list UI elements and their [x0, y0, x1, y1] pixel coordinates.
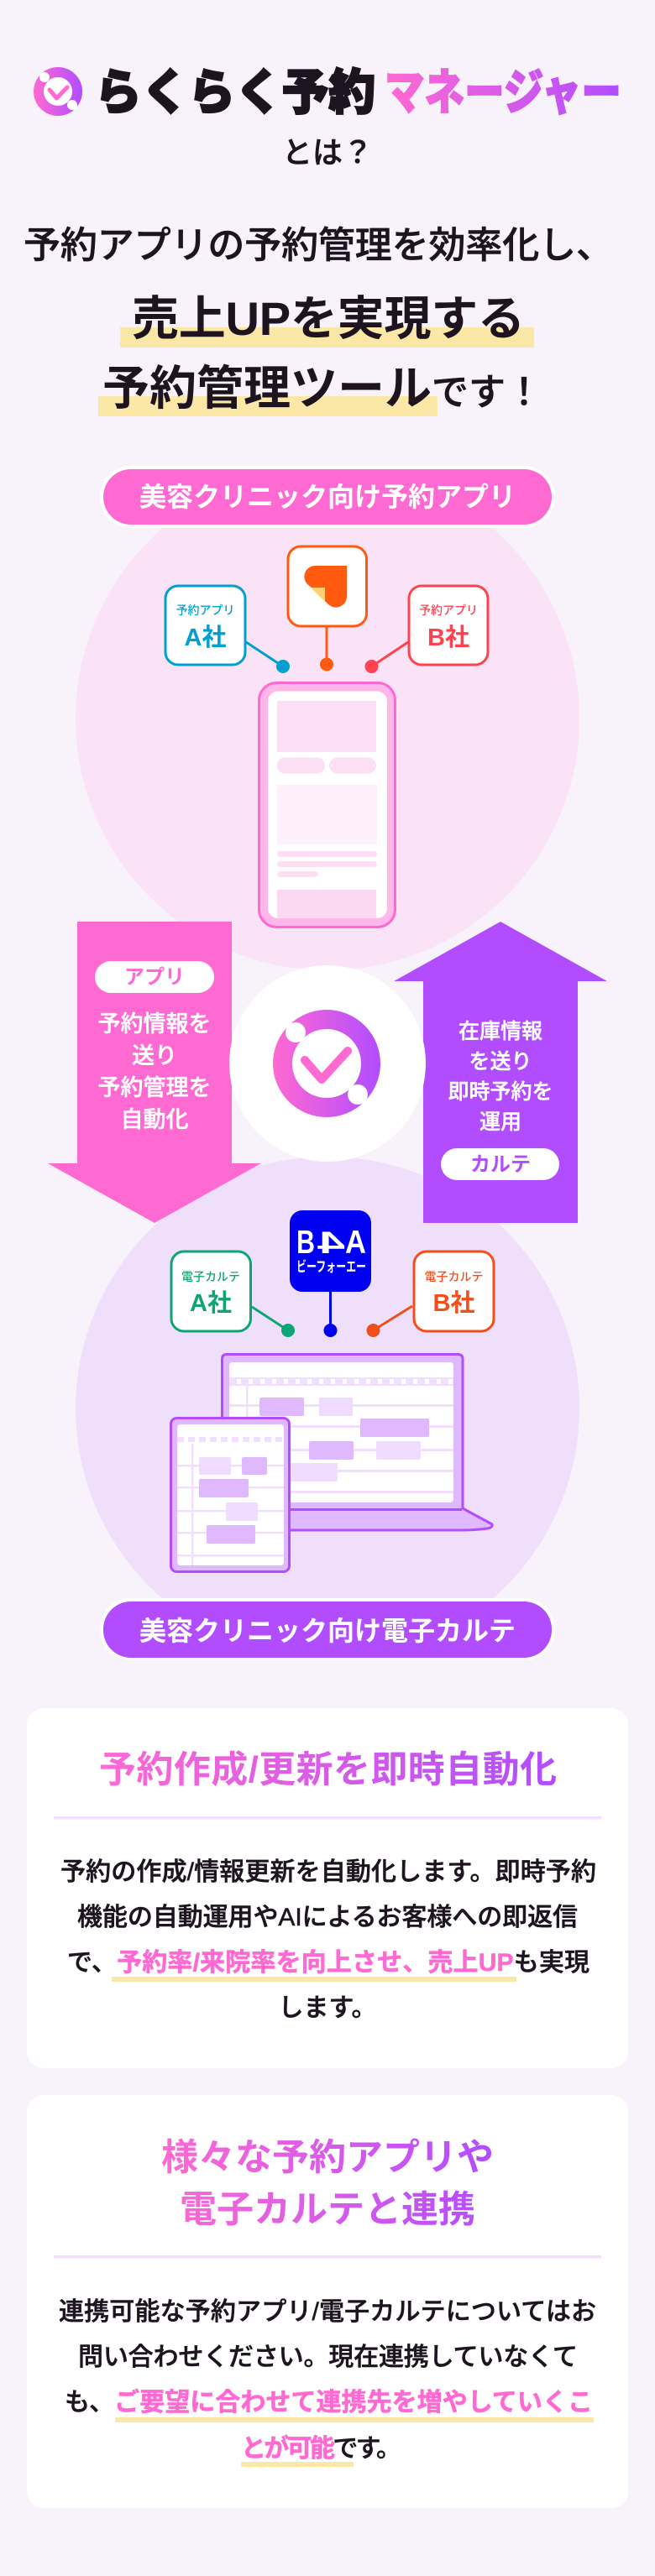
card 2 underlines [115, 2417, 594, 2467]
arrow text: 自動化 [121, 1107, 188, 1132]
highlight band line 2 [120, 327, 534, 347]
heading: とは？: とは？ [282, 135, 373, 170]
card 1 body: 予約の作成/情報更新を自動化します。即時予約 [60, 1858, 596, 1886]
headline line 2: 売上UPを実現する [132, 292, 525, 345]
card 1 heading: 予約作成/更新を即時自動化 [99, 1749, 557, 1790]
card 2 heading [161, 2137, 494, 2230]
tablet illustration [171, 1419, 289, 1571]
label pill: アプリ: アプリ [124, 966, 185, 989]
headline line 3: 予約管理ツールです！ [102, 362, 542, 415]
card: app A: 予約アプリ [176, 604, 235, 617]
logo [39, 65, 621, 120]
arrow text: 予約情報を [97, 1011, 212, 1037]
pill: reservation apps label: 美容クリニック向け予約アプリ [139, 482, 516, 512]
arrow text: 送り [132, 1043, 177, 1069]
card 2 body [59, 2298, 596, 2463]
icon: B4A logo [290, 1210, 371, 1292]
card 2 body: 連携可能な予約アプリ/電子カルテについてはお [59, 2298, 596, 2326]
card 1 body [60, 1858, 596, 2022]
arrow: records to apps [394, 922, 607, 1223]
logo wordmark [95, 65, 621, 120]
card: record B [414, 1251, 494, 1331]
pill: reservation apps label [100, 466, 555, 528]
card: app B [409, 586, 488, 665]
icon: center reservation app [288, 546, 366, 626]
panel: card 2 [27, 2095, 628, 2508]
card: app A [165, 586, 245, 665]
connector: app A [246, 642, 290, 673]
label pill: アプリ [95, 961, 214, 993]
card 1 body: 機能の自動運用やAIによるお客様への即返信 [77, 1904, 578, 1931]
phone illustration [259, 683, 395, 927]
arrow: apps to records [48, 922, 261, 1223]
panel: card 1 [27, 1708, 628, 2068]
icon: B4A logo: 4 [317, 1225, 345, 1260]
pill: medical records label [100, 1598, 555, 1660]
card: record B: 電子カルテ [425, 1270, 484, 1283]
card: record B: B社 [433, 1289, 474, 1317]
connector: center record [324, 1292, 338, 1337]
card: record A [171, 1251, 250, 1331]
connector: center app [320, 627, 333, 671]
logo wordmark: らくらく予約 [95, 65, 375, 120]
card: app B: 予約アプリ [419, 604, 478, 617]
card 1 underline [112, 1977, 516, 1982]
arrow text [448, 1020, 553, 1134]
headline line 1: 予約アプリの予約管理を効率化し、 [24, 225, 613, 266]
highlight band line 3 [98, 396, 438, 416]
card 2 body: 問い合わせください。現在連携していなくて [78, 2343, 578, 2371]
icon: B4A logo: ビーフォーエー [296, 1258, 366, 1275]
label pill: カルテ [441, 1148, 559, 1180]
connector: app B [364, 642, 408, 673]
connector: record A [252, 1307, 295, 1337]
icon: B4A logo: B [296, 1225, 315, 1261]
panel: reservation apps circle [76, 467, 579, 970]
label pill: カルテ: カルテ [470, 1153, 531, 1176]
icon: logo mark [39, 72, 77, 111]
arrow text: 運用 [479, 1110, 521, 1134]
card 2 heading: 電子カルテと連携 [180, 2189, 475, 2230]
arrow text: 即時予約を [448, 1080, 553, 1104]
card: record A: 電子カルテ [181, 1270, 240, 1283]
card 1 body: します。 [279, 1994, 376, 2022]
icon: B4A logo: A [345, 1225, 366, 1261]
icon: center hub logo [229, 965, 426, 1162]
panel: medical record circle [76, 1157, 579, 1660]
arrow text: 予約管理を [97, 1075, 212, 1100]
arrow text: 在庫情報 [458, 1020, 542, 1043]
laptop illustration [222, 1355, 492, 1530]
card: record A: A社 [190, 1289, 232, 1317]
arrow text [97, 1011, 212, 1132]
connector: record B [366, 1306, 412, 1337]
card: app B: B社 [427, 624, 469, 651]
card 2 body: も、ご要望に合わせて連携先を増やしていくこ [65, 2388, 593, 2417]
arrow text: を送り [469, 1050, 532, 1074]
headline [24, 225, 613, 416]
pill: medical records label: 美容クリニック向け電子カルテ [139, 1616, 516, 1646]
card 2 heading: 様々な予約アプリや [161, 2137, 494, 2178]
card 1 body: で、予約率/来院率を向上させ、売上UPも実現 [67, 1949, 590, 1977]
card 2 body: とが可能です。 [241, 2434, 401, 2463]
card: app A: A社 [185, 624, 226, 651]
